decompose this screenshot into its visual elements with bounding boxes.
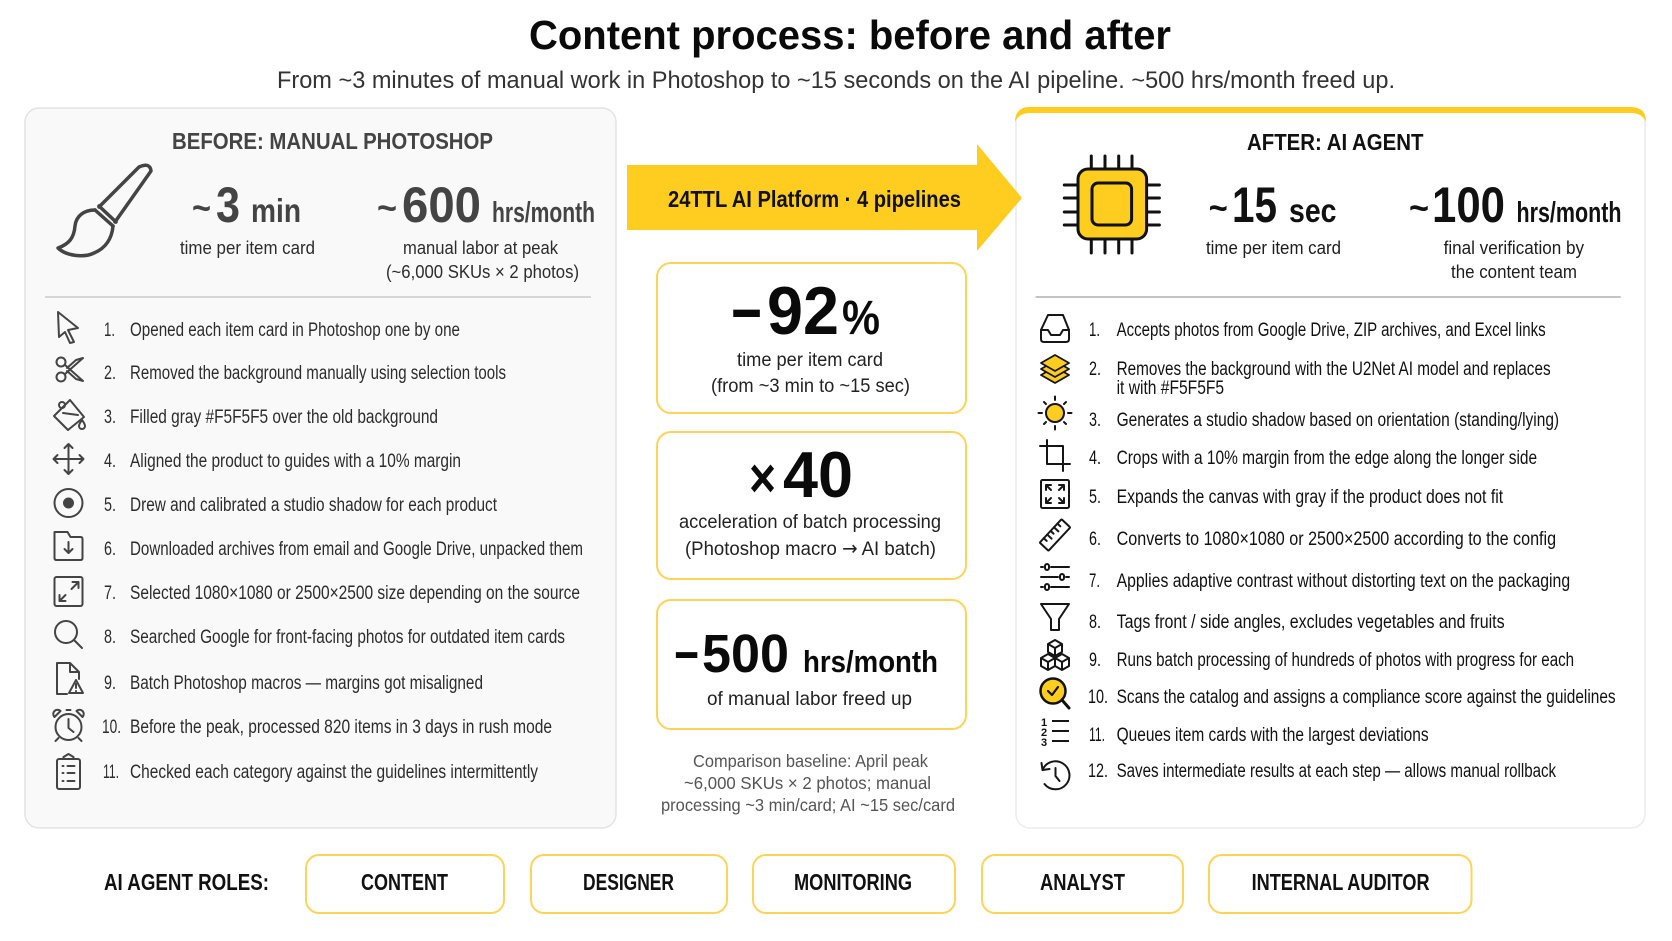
step 5: Expands the canvas with gray if the product does not fit (1117, 487, 1504, 508)
step 9: 9. (104, 673, 116, 694)
card: minus 500 hours: − (674, 625, 699, 685)
icon: target (54, 489, 82, 517)
role: monitoring: MONITORING (794, 869, 912, 895)
step 4 (54, 444, 461, 474)
icon: yellow layers (1041, 355, 1069, 383)
icon: cursor (58, 312, 78, 343)
panel background (1016, 108, 1645, 828)
card: times 40: acceleration of batch processing (679, 511, 941, 533)
icon: inbox tray (1041, 315, 1069, 342)
step 5: Drew and calibrated a studio shadow for each product (130, 495, 498, 516)
step 3: Generates a studio shadow based on orientation (standing/lying) (1117, 410, 1559, 431)
step 9: 9. (1089, 650, 1101, 671)
icon: compliance scan (1040, 678, 1069, 708)
stat: 3 minutes (180, 177, 315, 258)
roles label: AI AGENT ROLES: (104, 869, 269, 895)
icon: numbered list (1041, 717, 1069, 749)
icon: resize (54, 577, 82, 606)
step 11: Queues item cards with the largest deviations (1117, 725, 1429, 746)
step 11: Checked each category against the guidelines intermittently (130, 762, 538, 783)
card: times 40: × (749, 446, 776, 509)
stat: 3 minutes: ~ (192, 187, 211, 228)
stat: 100 hours per month: the content team (1451, 261, 1577, 282)
stat: 100 hours per month: final verification by (1444, 237, 1585, 258)
step 3 (54, 400, 438, 430)
step 9 (57, 663, 483, 694)
step 7: Applies adaptive contrast without distorting text on the packaging (1117, 571, 1570, 592)
card: times 40 (657, 432, 966, 579)
icon: clipboard (57, 754, 80, 789)
step 10: 10. (102, 717, 121, 738)
step 6: 6. (1089, 529, 1101, 550)
icon: magnifier (55, 621, 82, 648)
step 11: 11. (1089, 725, 1105, 746)
stat: 15 seconds: time per item card (1206, 237, 1341, 258)
step 7: 7. (104, 583, 116, 604)
step 2: Removes the background with the U2Net AI model and replaces (1117, 359, 1551, 380)
icon: scissors (56, 358, 83, 382)
step 1 (1041, 315, 1546, 342)
icon: history clock (1042, 761, 1069, 789)
icon: numbered list: 2 (1041, 727, 1047, 739)
step 9 (1041, 640, 1574, 671)
step 7: Selected 1080×1080 or 2500×2500 size depending on the source (130, 583, 580, 604)
role: designer: DESIGNER (583, 869, 674, 895)
card: minus 92 percent: − (731, 275, 762, 351)
icon: numbered list: 3 (1041, 737, 1047, 749)
step 11 (1041, 717, 1429, 749)
step 3: 3. (1089, 410, 1101, 431)
step 10 (1040, 678, 1616, 708)
role: internal auditor: INTERNAL AUDITOR (1252, 869, 1430, 895)
stat: 15 seconds: ~ (1209, 187, 1228, 228)
step 11: 11. (103, 762, 119, 783)
step 2: 2. (104, 363, 116, 384)
step 5 (1041, 480, 1504, 508)
step 2 (56, 358, 506, 384)
card: minus 500 hours: hrs/month (803, 644, 938, 679)
step 2: it with #F5F5F5 (1117, 378, 1224, 399)
stat: 600 hours per month: 600 (402, 177, 481, 233)
card: times 40: (Photoshop macro → AI batch) (685, 537, 936, 560)
step 8 (1041, 604, 1505, 633)
stat: 3 minutes: 3 (216, 177, 240, 233)
yellow top accent (1015, 107, 1646, 122)
step 10: Before the peak, processed 820 items in 3 days in rush mode (130, 717, 552, 738)
step 8: 8. (1089, 612, 1101, 633)
icon: alarm clock (53, 710, 84, 741)
heading: after: AFTER: AI AGENT (1247, 129, 1424, 155)
step 5: 5. (104, 495, 116, 516)
icon: folder download (54, 532, 82, 560)
icon: ai chip (1064, 156, 1159, 253)
stat: 15 seconds (1206, 177, 1341, 258)
step 1: 1. (1089, 320, 1100, 341)
baseline note: processing ~3 min/card; AI ~15 sec/card (661, 795, 955, 815)
subtitle: From ~3 minutes of manual work in Photoshop to ~15 seconds on the AI pipeline. ~500 hrs/month freed up. (277, 67, 1395, 94)
step 8: Searched Google for front-facing photos for outdated item cards (130, 627, 565, 648)
panel background (25, 108, 616, 828)
card: minus 500 hours: of manual labor freed up (707, 688, 912, 710)
card: minus 92 percent: % (842, 292, 880, 345)
baseline note: Comparison baseline: April peak (693, 751, 928, 771)
card: minus 92 percent: time per item card (737, 349, 883, 371)
step 7: 7. (1089, 571, 1100, 592)
step 1: 1. (104, 320, 115, 341)
step 8 (55, 621, 565, 648)
step 1 (58, 312, 460, 343)
card: times 40: 40 (783, 438, 853, 511)
stat: 600 hours per month: hrs/month (492, 197, 595, 229)
step 6: Converts to 1080×1080 or 2500×2500 according to the config (1117, 529, 1556, 550)
stat: 3 minutes: min (251, 192, 301, 229)
step 10 (53, 710, 552, 741)
icon: funnel (1041, 604, 1069, 630)
role: content: CONTENT (361, 869, 448, 895)
icon: sliders (1041, 564, 1069, 590)
stat: 600 hours per month: manual labor at peak (403, 237, 559, 258)
role: designer (531, 855, 727, 913)
role: analyst: ANALYST (1040, 869, 1125, 895)
role: content (306, 855, 504, 913)
icon: move arrows (54, 444, 84, 474)
panel: before manual photoshop (25, 108, 616, 828)
icon: numbered list: 1 (1041, 717, 1047, 729)
card: minus 92 percent: 92 (767, 273, 839, 349)
stat: 100 hours per month: ~ (1409, 187, 1429, 228)
stat: 15 seconds: 15 (1232, 177, 1277, 233)
baseline note (661, 751, 955, 815)
icon: ruler (1040, 519, 1070, 551)
step 1: Accepts photos from Google Drive, ZIP archives, and Excel links (1117, 320, 1546, 341)
step 8: 8. (104, 627, 116, 648)
step 6: 6. (104, 539, 116, 560)
step 4: 4. (104, 451, 116, 472)
step 6 (1040, 519, 1556, 551)
step 1: Opened each item card in Photoshop one by one (130, 320, 460, 341)
heading: before: BEFORE: MANUAL PHOTOSHOP (172, 128, 493, 154)
icon: paint bucket (54, 400, 85, 430)
role: monitoring (753, 855, 955, 913)
card: minus 500 hours (657, 600, 966, 729)
step 6: Downloaded archives from email and Google Drive, unpacked them (130, 539, 583, 560)
icon: cubes (1041, 640, 1069, 670)
step 12: Saves intermediate results at each step — allows manual rollback (1117, 761, 1556, 782)
step 4: 4. (1089, 448, 1101, 469)
role: analyst (982, 855, 1183, 913)
step 12: 12. (1088, 761, 1108, 782)
step 5 (54, 489, 498, 517)
icon: sun (1038, 396, 1072, 430)
step 4: Crops with a 10% margin from the edge along the longer side (1117, 448, 1537, 469)
step 2 (1041, 355, 1551, 399)
step 9: Batch Photoshop macros — margins got misaligned (130, 673, 483, 694)
title: Content process: before and after (529, 12, 1171, 58)
role: internal auditor (1209, 855, 1472, 913)
panel: after ai agent (1015, 107, 1646, 828)
step 7 (1041, 564, 1570, 592)
card: minus 92 percent: (from ~3 min to ~15 sec) (711, 375, 910, 397)
stat: 100 hours per month (1409, 177, 1622, 282)
step 4: Aligned the product to guides with a 10% margin (130, 451, 461, 472)
step 10: 10. (1088, 687, 1108, 708)
step 11 (57, 754, 538, 789)
step 8: Tags front / side angles, excludes vegetables and fruits (1117, 612, 1505, 633)
step 3: Filled gray #F5F5F5 over the old background (130, 407, 438, 428)
step 3 (1038, 396, 1559, 431)
step 12 (1042, 761, 1556, 789)
step 5: 5. (1089, 487, 1101, 508)
icon: expand canvas (1041, 480, 1069, 508)
stat: 100 hours per month: 100 (1432, 177, 1505, 233)
arrow: platform banner: 24TTL AI Platform · 4 pipelines (668, 186, 961, 212)
card: minus 92 percent (657, 263, 966, 413)
arrow: platform banner (627, 144, 1022, 251)
icon: paint brush (58, 165, 151, 256)
card: minus 500 hours: 500 (702, 624, 789, 684)
icon: file warning (57, 663, 83, 694)
stat: 600 hours per month (377, 177, 595, 282)
step 2: 2. (1089, 359, 1101, 380)
stat: 100 hours per month: hrs/month (1516, 197, 1622, 229)
step 2: Removed the background manually using selection tools (130, 363, 506, 384)
step 4 (1040, 440, 1537, 471)
baseline note: ~6,000 SKUs × 2 photos; manual (684, 773, 931, 793)
stat: 600 hours per month: (~6,000 SKUs × 2 photos) (386, 261, 579, 282)
icon: crop (1040, 440, 1070, 471)
step 6 (54, 532, 583, 560)
step 7 (54, 577, 580, 606)
step 3: 3. (104, 407, 116, 428)
stat: 15 seconds: sec (1289, 192, 1336, 229)
stat: 600 hours per month: ~ (377, 187, 397, 228)
stat: 3 minutes: time per item card (180, 237, 315, 258)
